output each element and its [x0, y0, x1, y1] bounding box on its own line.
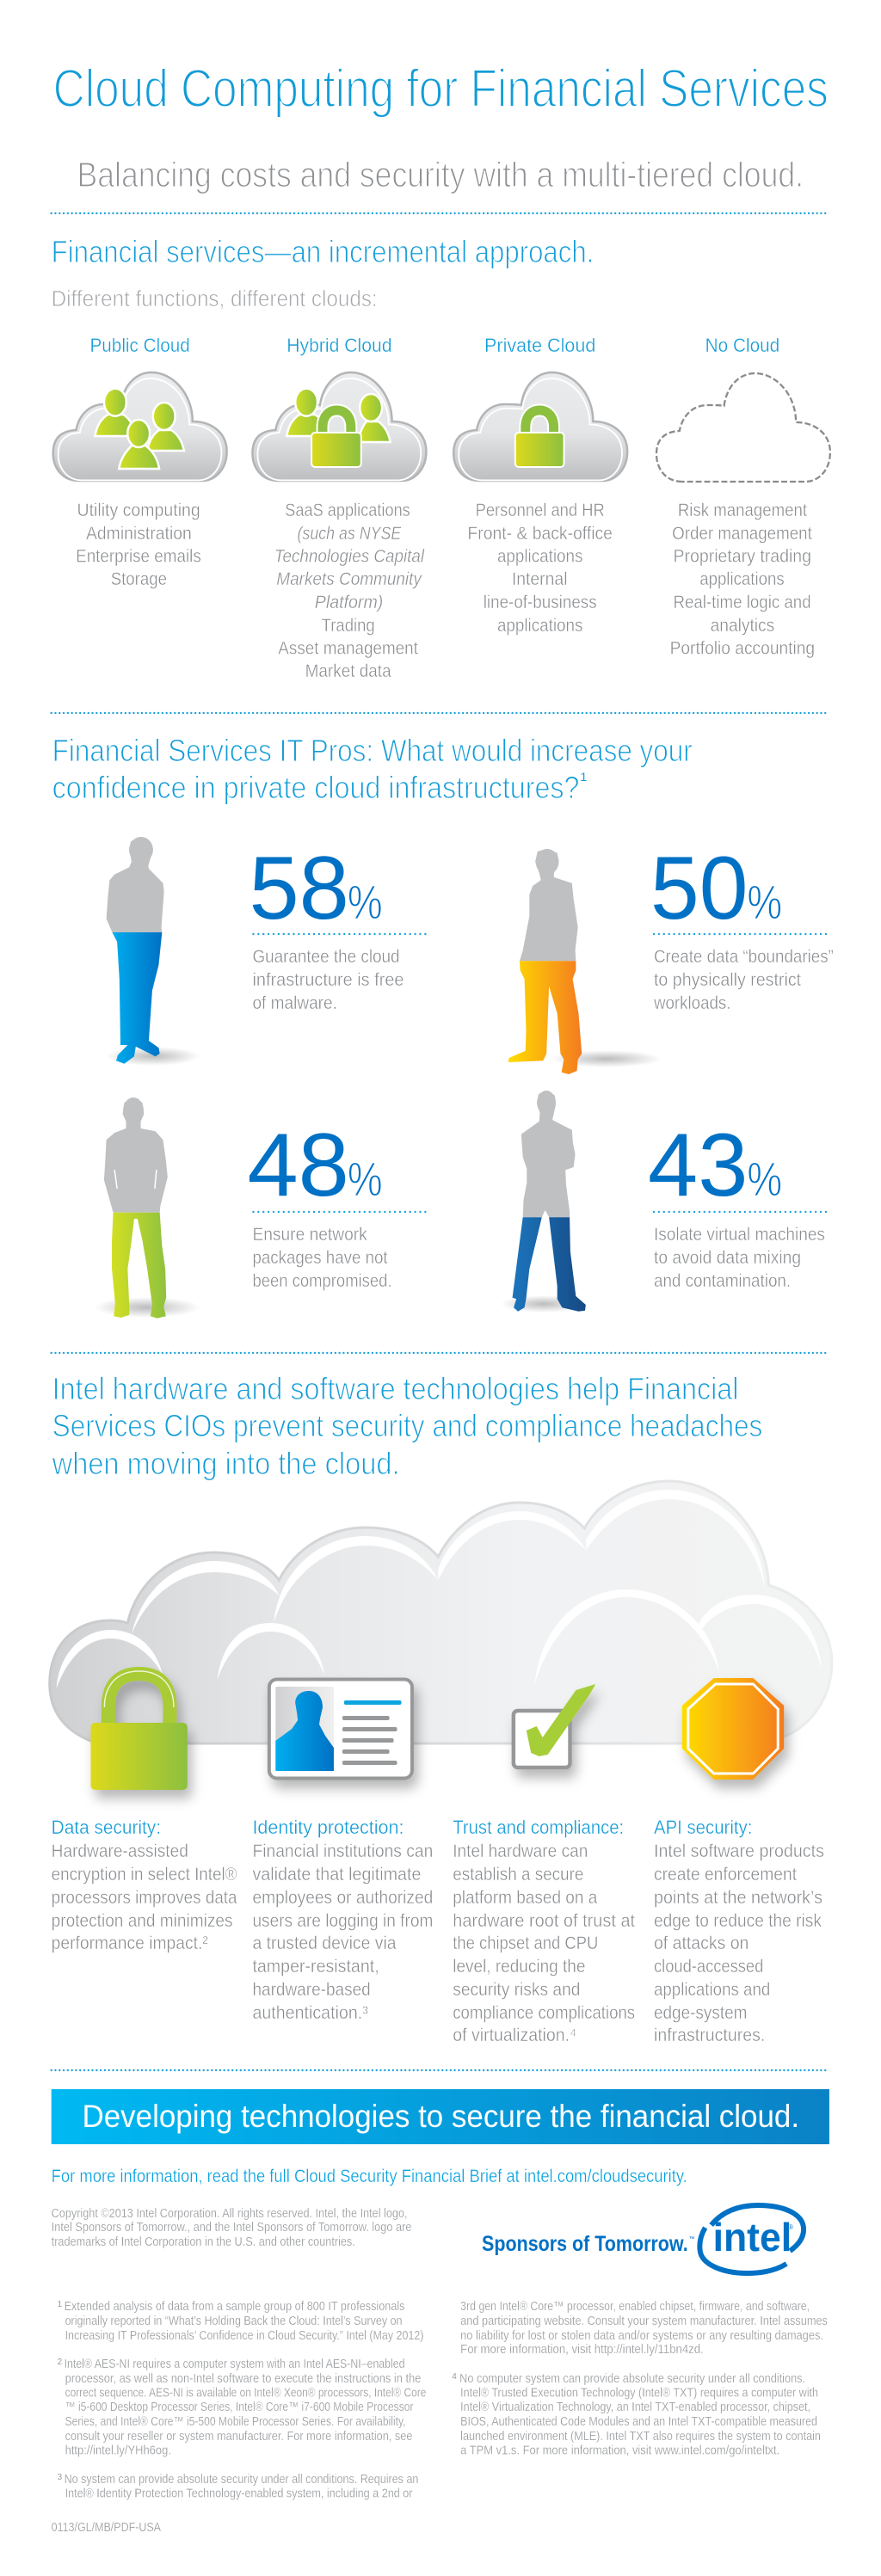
subheading: different clouds: Different functions, different clouds: — [52, 287, 378, 311]
footnotes: left column: processor, as well as non-Intel software to execute the instructions in the — [65, 2372, 421, 2386]
panel: identity protection: Identity protection: — [252, 1817, 404, 1838]
panel: hybrid cloud — [252, 335, 426, 681]
footnotes: right column: 3rd gen Intel® Core™ processor, enabled chipset, firmware, and software, — [460, 2300, 810, 2314]
panel: trust and compliance: hardware root of trust at — [453, 1911, 635, 1931]
list: private cloud functions: Personnel and HR — [476, 501, 605, 520]
panel: data security: protection and minimizes — [52, 1911, 233, 1931]
panel: API security: points at the network’s — [654, 1888, 822, 1908]
footnotes: left column — [58, 2300, 426, 2501]
stat description: Create data “boundaries” — [654, 947, 834, 967]
footnotes: right column: BIOS, Authenticated Code Modules and an Intel TXT-compatible measured — [460, 2415, 817, 2429]
panel: data security: performance impact.² — [52, 1934, 208, 1953]
panel: trust and compliance — [453, 1817, 635, 2045]
heading: IT pros question — [52, 734, 693, 805]
list: public cloud functions: Utility computing — [77, 501, 200, 520]
icon: dashed cloud outline — [656, 373, 830, 482]
panel: no cloud — [656, 335, 830, 659]
list: hybrid cloud functions: Market data — [305, 661, 391, 681]
illustration: large cloud — [50, 1481, 832, 1743]
list: no cloud functions: Order management — [672, 524, 812, 544]
panel: data security: Hardware-assisted — [52, 1841, 188, 1861]
footnotes: right column: 4 — [452, 2372, 457, 2382]
list: hybrid cloud functions: SaaS applications — [285, 501, 410, 520]
stat: 48%: % — [348, 1152, 383, 1206]
list: hybrid cloud functions: Trading — [322, 616, 375, 636]
footnotes: left column: Extended analysis of data from a sample group of 800 IT professionals — [65, 2300, 405, 2314]
list: hybrid cloud functions — [274, 501, 425, 681]
stat description: packages have not — [252, 1248, 388, 1268]
heading: intel hardware and software — [52, 1372, 762, 1481]
footnotes: left column: No system can provide absolute security under all conditions. Requires an — [65, 2473, 418, 2487]
heading: IT pros question: confidence in private cloud infrastructures? — [52, 771, 579, 805]
panel: private cloud — [453, 335, 627, 636]
panel: API security: edge to reduce the risk — [654, 1911, 822, 1931]
panel: trust and compliance: establish a secure — [453, 1865, 583, 1884]
heading: intel hardware and software: when moving into the cloud. — [52, 1447, 400, 1481]
stat: 50%: 50 — [650, 838, 748, 938]
icon: cloud with people — [53, 372, 227, 481]
stat description: been compromised. — [252, 1271, 392, 1291]
list: private cloud functions: Front- & back-office — [467, 524, 613, 544]
footnotes: right column: For more information, visit http://intel.ly/11bn4zd. — [460, 2343, 704, 2357]
stat description: Guarantee the cloud — [252, 947, 400, 967]
copyright notice — [52, 2207, 411, 2249]
stat description: workloads. — [653, 993, 731, 1013]
panel: API security: applications and — [654, 1980, 770, 2000]
list: public cloud functions: Enterprise emails — [76, 546, 201, 567]
panel: data security: Data security: — [52, 1817, 161, 1838]
list: hybrid cloud functions: (such as NYSE — [297, 524, 402, 544]
figure: person with green trousers — [94, 1097, 200, 1319]
list: private cloud functions: applications — [497, 546, 582, 567]
copyright notice: trademarks of Intel Corporation in the U.S. and other countries. — [52, 2235, 355, 2249]
panel: identity protection: a trusted device via — [252, 1934, 397, 1953]
list: public cloud functions — [76, 501, 201, 589]
more information link text: For more information, read the full Cloud Security Financial Brief at intel.com/cloudsecurity. — [52, 2167, 687, 2186]
logo: sponsors of tomorrow and intel — [482, 2205, 804, 2273]
icon: stop sign — [682, 1678, 784, 1780]
publication code: 0113/GL/MB/PDF-USA — [52, 2521, 161, 2535]
footnotes: left column: consult your reseller or system manufacturer. For more information, see — [65, 2430, 412, 2444]
copyright notice: Intel Sponsors of Tomorrow., and the Intel Sponsors of Tomorrow. logo are — [52, 2221, 411, 2235]
stat description: Isolate virtual machines — [654, 1225, 825, 1245]
footnotes: left column: 1 — [58, 2300, 63, 2309]
panel: identity protection — [252, 1817, 433, 2023]
panel: data security — [52, 1817, 237, 1953]
panel: API security: edge-system — [654, 2003, 747, 2023]
logo: sponsors of tomorrow and intel: ® — [788, 2223, 793, 2231]
list: private cloud functions: applications — [497, 616, 582, 636]
stat description: infrastructure is free — [252, 970, 404, 990]
panel: identity protection: employees or authorized — [252, 1888, 433, 1908]
panel: identity protection: Financial institutions can — [252, 1841, 433, 1861]
panel: 43 percent stat — [501, 1091, 829, 1313]
list: public cloud functions: Administration — [86, 524, 192, 544]
list: private cloud functions — [467, 501, 613, 636]
footnotes: right column: and participating website. Consult your system manufacturer. Intel assumes — [460, 2315, 828, 2328]
panel: trust and compliance: level, reducing the — [453, 1957, 585, 1977]
icon: cloud with lock — [453, 372, 627, 481]
footnotes: left column: http://intel.ly/YHh6og. — [65, 2444, 171, 2458]
logo: sponsors of tomorrow and intel: ™ — [689, 2236, 695, 2242]
panel: identity protection: hardware-based — [252, 1980, 371, 2000]
list: hybrid cloud functions: Markets Community — [276, 569, 422, 589]
stat: 50%: % — [747, 875, 782, 929]
panel: API security: API security: — [654, 1817, 752, 1838]
icon: checkbox with tick — [514, 1684, 595, 1768]
list: private cloud functions: Internal — [512, 569, 568, 589]
footnotes: left column: correct sequence. AES-NI is available on Intel® Xeon® processors, Intel® Core — [65, 2386, 426, 2401]
panel: API security: infrastructures. — [654, 2026, 765, 2045]
list: no cloud functions — [670, 501, 815, 659]
stat description: and contamination. — [654, 1271, 791, 1291]
column heading: hybrid cloud: Hybrid Cloud — [286, 335, 392, 356]
banner — [52, 2089, 829, 2144]
banner: Developing technologies to secure the financial cloud. — [82, 2099, 799, 2134]
stat description: Ensure network — [252, 1225, 367, 1245]
list: hybrid cloud functions: Technologies Capital — [274, 546, 425, 567]
icon: padlock — [90, 1671, 188, 1790]
panel: identity protection: validate that legitimate — [252, 1865, 421, 1884]
panel: 50 percent stat — [508, 838, 834, 1074]
panel: trust and compliance: compliance complications — [453, 2003, 635, 2023]
column heading: no cloud: No Cloud — [705, 335, 779, 356]
panel: trust and compliance: security risks and — [453, 1980, 580, 2000]
footnotes: right column: a TPM v1.s. For more information, visit www.intel.com/go/inteltxt. — [460, 2444, 779, 2458]
footnotes: left column: 3 — [58, 2473, 63, 2482]
stat: 58%: 58 — [249, 838, 349, 938]
list: no cloud functions: Proprietary trading — [673, 546, 811, 567]
icon: cloud with people and lock — [252, 372, 426, 481]
footnotes: left column: ™ i5-600 Desktop Processor Series, Intel® Core™ i7-600 Mobile Processor — [65, 2401, 414, 2414]
stat description — [654, 1225, 825, 1291]
heading: IT pros question: Financial Services IT Pros: What would increase your — [52, 734, 693, 768]
list: hybrid cloud functions: Platform) — [315, 593, 383, 612]
panel: trust and compliance: the chipset and CPU — [453, 1934, 598, 1953]
stat: 43%: 43 — [648, 1115, 748, 1214]
panel: API security: Intel software products — [654, 1841, 824, 1861]
heading: intel hardware and software: Intel hardware and software technologies help Financial — [52, 1372, 738, 1406]
footnotes: left column: originally reported in “What’s Holding Back the Cloud: Intel’s Survey on — [65, 2315, 403, 2328]
footnotes: left column: 2 — [58, 2358, 63, 2367]
panel: public cloud — [53, 335, 227, 589]
list: no cloud functions: Risk management — [678, 501, 807, 520]
panel: API security: cloud-accessed — [654, 1957, 763, 1977]
stat: 43%: % — [747, 1152, 782, 1206]
footnotes: left column: Series, and Intel® Core™ i5-500 Mobile Processor Series. For availability, — [65, 2415, 406, 2429]
stat description: to physically restrict — [654, 970, 801, 990]
panel: API security — [654, 1817, 824, 2045]
panel: identity protection: authentication.³ — [252, 2003, 368, 2023]
panel: API security: of attacks on — [654, 1934, 749, 1953]
footnotes: right column: Intel® Trusted Execution Technology (Intel® TXT) requires a computer with — [460, 2386, 818, 2401]
footnotes: right column: launched environment (MLE). Intel TXT also requires the system to contain — [460, 2430, 821, 2444]
panel: trust and compliance: of virtualization.⁴ — [453, 2026, 576, 2045]
panel: API security: create enforcement — [654, 1865, 797, 1884]
list: public cloud functions: Storage — [111, 569, 167, 589]
heading: IT pros question: 1 — [580, 770, 587, 784]
footnotes: left column: Intel® Identity Protection Technology-enabled system, including a 2nd or — [65, 2487, 413, 2501]
panel: data security: processors improves data — [52, 1888, 237, 1908]
footnotes: left column: Increasing IT Professionals’ Confidence in Cloud Security.” Intel (May 2012) — [65, 2329, 423, 2343]
panel: 58 percent stat — [106, 837, 428, 1066]
stat: 58%: % — [348, 875, 383, 929]
stat description: of malware. — [252, 993, 337, 1013]
stat: 48%: 48 — [247, 1115, 349, 1214]
figure: person with blue trousers — [106, 837, 200, 1066]
footnotes: right column — [452, 2300, 828, 2458]
panel: 48 percent stat — [94, 1097, 428, 1319]
footnotes: right column: Intel® Virtualization Technology, an Intel TXT-enabled processor, chipset, — [460, 2401, 810, 2414]
panel: trust and compliance: platform based on a — [453, 1888, 598, 1908]
stat description — [653, 947, 834, 1013]
stat description: to avoid data mixing — [654, 1248, 801, 1268]
panel: trust and compliance: Intel hardware can — [453, 1841, 588, 1861]
heading: incremental approach: Financial services—an incremental approach. — [52, 235, 594, 269]
stat description — [252, 947, 404, 1013]
footnotes: right column: No computer system can provide absolute security under all conditions. — [459, 2372, 805, 2386]
list: hybrid cloud functions: Asset management — [278, 638, 418, 659]
figure: person with navy trousers — [501, 1091, 587, 1313]
footnotes: left column: Intel® AES-NI requires a computer system with an Intel AES-NI–enabled — [65, 2358, 405, 2371]
column heading: private cloud: Private Cloud — [484, 335, 595, 356]
figure: person with orange trousers — [508, 849, 662, 1074]
stat description — [252, 1225, 392, 1291]
panel: trust and compliance: Trust and compliance: — [453, 1817, 624, 1838]
list: private cloud functions: line-of-business — [484, 593, 597, 612]
list: no cloud functions: Real-time logic and — [673, 593, 811, 612]
panel: identity protection: tamper-resistant, — [252, 1957, 379, 1977]
footnotes: right column: no liability for lost or stolen data and/or systems or any resulting damages. — [460, 2329, 823, 2343]
panel: data security: encryption in select Intel® — [52, 1865, 237, 1884]
list: no cloud functions: Portfolio accounting — [670, 638, 815, 659]
logo: sponsors of tomorrow and intel: intel — [713, 2215, 792, 2259]
list: no cloud functions: analytics — [711, 616, 774, 636]
list: no cloud functions: applications — [699, 569, 785, 589]
logo: sponsors of tomorrow and intel: Sponsors of Tomorrow. — [482, 2232, 688, 2256]
panel: identity protection: users are logging in from — [252, 1911, 433, 1931]
icon: identity card — [269, 1679, 412, 1779]
copyright notice: Copyright ©2013 Intel Corporation. All rights reserved. Intel, the Intel logo, — [52, 2207, 408, 2221]
column heading: public cloud: Public Cloud — [89, 335, 190, 356]
heading: intel hardware and software: Services CIOs prevent security and compliance headaches — [52, 1409, 762, 1443]
